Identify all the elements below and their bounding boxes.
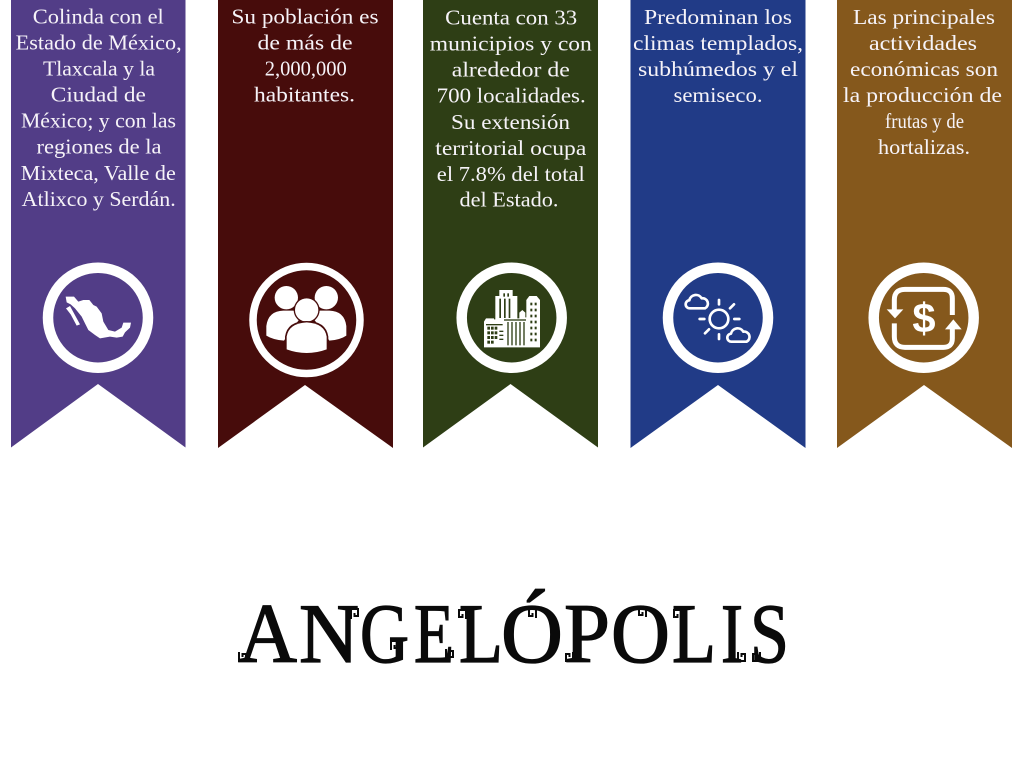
text: climas: subhúmedos y el	[638, 57, 798, 81]
text: economia: actividades	[869, 31, 977, 55]
text: municipios: el 7.8% del total	[437, 162, 585, 186]
title: L	[672, 587, 716, 681]
text: municipios: 700 localidades.	[437, 84, 586, 108]
text: colindancias	[16, 4, 182, 211]
panel: ribbon climas	[630, 0, 806, 448]
title: E	[414, 587, 454, 681]
icon: money cycle: $	[912, 294, 936, 341]
text: municipios: alrededor de	[452, 58, 570, 82]
icon: group of people	[253, 266, 360, 374]
panel: ribbon economia	[837, 0, 1012, 448]
text: colindancias: Ciudad de	[51, 83, 146, 107]
icon: city buildings	[462, 268, 562, 368]
text: poblacion: 2,000,000	[265, 56, 347, 80]
panel: ribbon poblacion	[218, 0, 393, 448]
text: colindancias: Atlixco y Serdán.	[22, 187, 176, 211]
icon: map of Mexico	[48, 268, 148, 368]
text: climas: climas templados,	[633, 31, 803, 55]
text: climas: Predominan los	[644, 5, 792, 29]
text: municipios: del Estado.	[460, 188, 558, 212]
title: S	[750, 587, 789, 681]
text: economia: económicas son	[850, 57, 998, 81]
text: climas	[633, 5, 803, 107]
text: municipios: territorial ocupa	[435, 136, 587, 160]
title: L	[459, 587, 503, 681]
text: colindancias: Estado de México,	[16, 31, 182, 55]
title: P	[564, 587, 610, 681]
text: economia: hortalizas.	[878, 135, 970, 159]
text: colindancias: México; y con las	[21, 108, 176, 132]
text: economia: la producción de	[843, 83, 1002, 107]
icon: money cycle	[874, 268, 974, 368]
text: municipios: Su extensión	[451, 110, 570, 134]
text: economia: frutas y de	[885, 109, 964, 133]
text: municipios: Cuenta con 33	[445, 5, 577, 29]
text: poblacion	[232, 4, 378, 106]
title: N	[299, 587, 359, 681]
text: climas: semiseco.	[674, 83, 762, 107]
text: colindancias: regiones de la	[36, 134, 162, 158]
text: economia	[843, 5, 1002, 159]
text: poblacion: Su población es	[232, 4, 378, 28]
title: G	[360, 587, 409, 681]
title: Ó	[501, 587, 563, 681]
text: poblacion: de más de	[258, 30, 352, 54]
panel: ribbon colindancias	[11, 0, 186, 448]
text: colindancias: Tlaxcala y la	[43, 56, 155, 80]
text: colindancias: Mixteca, Valle de	[21, 161, 176, 185]
text: economia: Las principales	[853, 5, 995, 29]
title: I	[721, 587, 743, 681]
text: poblacion: habitantes.	[254, 82, 355, 106]
text: municipios	[430, 5, 592, 212]
text: municipios: municipios y con	[430, 32, 592, 56]
panel: ribbon municipios	[423, 0, 598, 448]
icon: sun and clouds	[668, 268, 768, 368]
title: O	[611, 587, 670, 681]
title: A	[238, 587, 297, 681]
text: colindancias: Colinda con el	[33, 4, 164, 28]
title	[238, 587, 789, 681]
